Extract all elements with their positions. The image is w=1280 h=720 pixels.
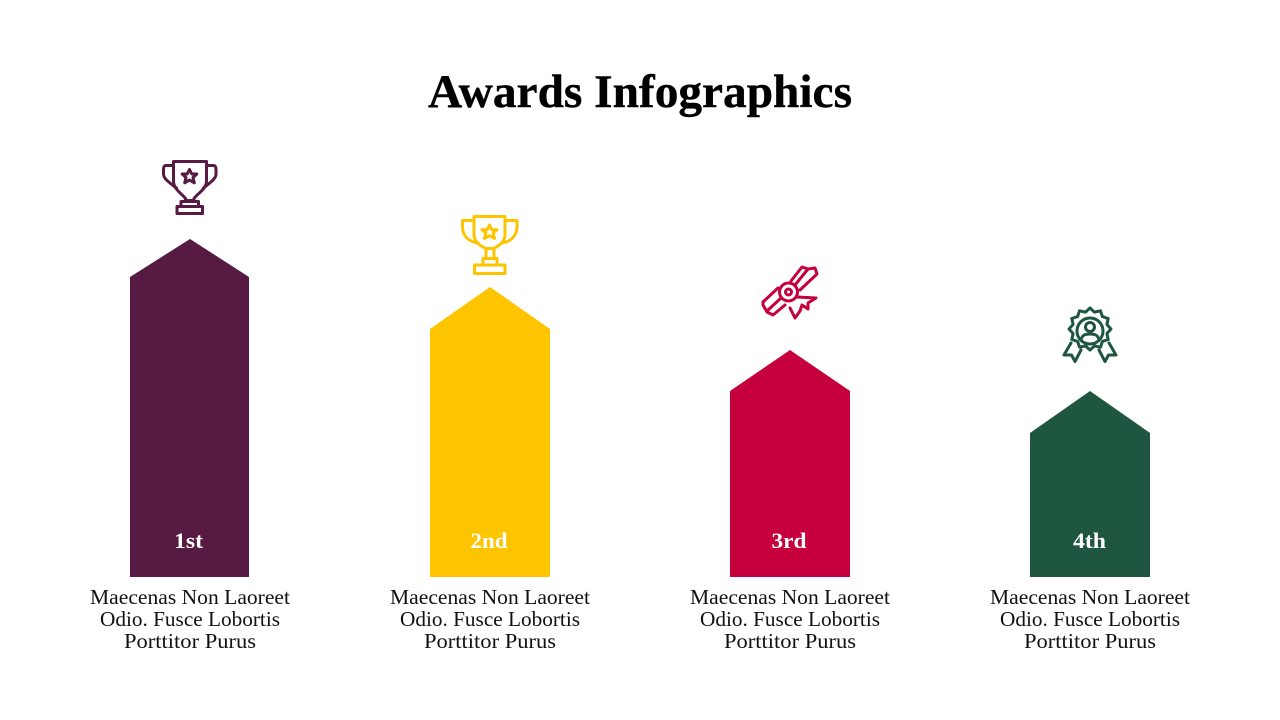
description: 4th bbox=[990, 585, 1190, 653]
icon: purple trophy bbox=[164, 162, 216, 214]
panel: 3rd place bbox=[690, 267, 890, 653]
description: 1st bbox=[90, 585, 290, 653]
icon: red diploma scroll bbox=[763, 267, 817, 318]
panel: 4th place bbox=[990, 308, 1190, 653]
description: 1st: Porttitor Purus bbox=[124, 629, 256, 653]
description: 4th: Porttitor Purus bbox=[1024, 629, 1156, 653]
bar: 2nd bbox=[430, 287, 550, 577]
panel: 1st place bbox=[90, 162, 290, 653]
description: 2nd bbox=[390, 585, 590, 653]
description: 3rd: Porttitor Purus bbox=[724, 629, 856, 653]
description: 3rd: Odio. Fusce Lobortis bbox=[700, 607, 880, 631]
description: 1st: Maecenas Non Laoreet bbox=[90, 585, 290, 609]
description: 3rd: Maecenas Non Laoreet bbox=[690, 585, 890, 609]
description: 1st: Odio. Fusce Lobortis bbox=[100, 607, 280, 631]
rank label: 3rd: 3rd bbox=[772, 528, 806, 553]
description: 4th: Maecenas Non Laoreet bbox=[990, 585, 1190, 609]
bar: 4th bbox=[1030, 391, 1150, 577]
description: 4th: Odio. Fusce Lobortis bbox=[1000, 607, 1180, 631]
title: Awards Infographics bbox=[428, 66, 852, 118]
bar: 1st bbox=[130, 239, 249, 577]
rank label: 2nd: 2nd bbox=[470, 528, 508, 553]
description: 2nd: Porttitor Purus bbox=[424, 629, 556, 653]
rank label: 1st: 1st bbox=[174, 528, 204, 553]
description: 3rd bbox=[690, 585, 890, 653]
panel: 2nd place bbox=[390, 216, 590, 653]
icon: green rosette badge bbox=[1064, 308, 1116, 362]
rank label: 4th: 4th bbox=[1073, 528, 1106, 553]
description: 2nd: Maecenas Non Laoreet bbox=[390, 585, 590, 609]
description: 2nd: Odio. Fusce Lobortis bbox=[400, 607, 580, 631]
bar: 3rd bbox=[730, 350, 850, 577]
icon: yellow trophy bbox=[462, 216, 517, 274]
